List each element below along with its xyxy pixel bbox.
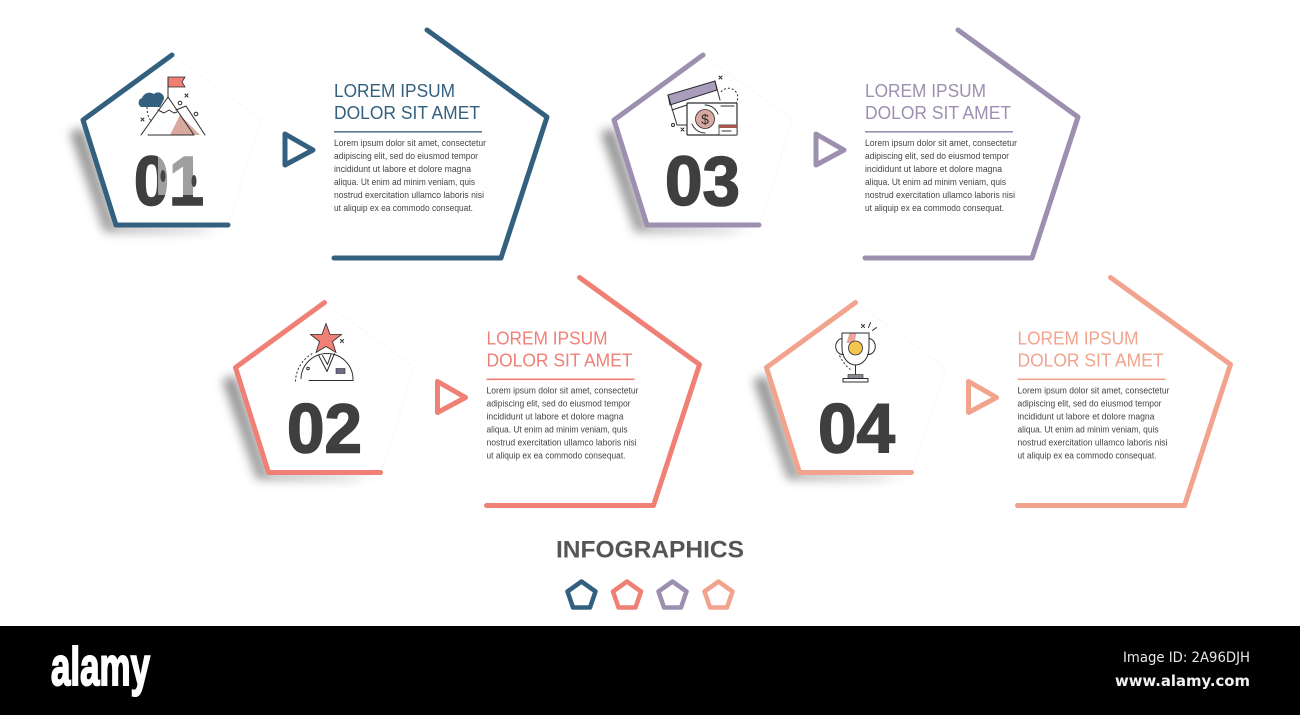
text pentagon outline (486, 278, 700, 506)
title: INFOGRAPHICS (556, 536, 744, 564)
body text: incididunt ut labore et dolore magna (865, 164, 1002, 174)
body text: incididunt ut labore et dolore magna (1018, 412, 1155, 422)
body text (1018, 386, 1170, 460)
icon: person with star (296, 324, 353, 382)
watermark over number (158, 153, 205, 195)
number 01: 01 (134, 142, 204, 220)
arrow (968, 382, 996, 412)
watermark bar (0, 626, 1300, 715)
heading (1018, 328, 1164, 370)
body text: ut aliquip ex ea commodo consequat. (486, 450, 626, 460)
heading: DOLOR SIT AMET (1018, 350, 1164, 370)
number pentagon outline (614, 55, 759, 225)
arrow (816, 134, 844, 165)
icon: credit card and money: $ (701, 111, 709, 127)
body text (865, 138, 1017, 213)
body text: aliqua. Ut enim ad minim veniam, quis (1018, 424, 1159, 434)
text pentagon outline (334, 30, 547, 258)
body text: ut aliquip ex ea commodo consequat. (334, 203, 473, 213)
body text (334, 138, 486, 213)
icon: mountain with flag (139, 77, 205, 135)
number pentagon outline (83, 55, 228, 225)
body text: ut aliquip ex ea commodo consequat. (865, 203, 1004, 213)
body text: ut aliquip ex ea commodo consequat. (1018, 450, 1156, 460)
number pentagon shadow (222, 376, 380, 482)
divider (865, 131, 1013, 133)
number pentagon background (614, 55, 793, 225)
heading: LOREM IPSUM (486, 328, 608, 348)
number pentagon shadow (754, 376, 912, 482)
body text: Lorem ipsum dolor sit amet, consectetur (486, 386, 639, 396)
panel: step 01 (70, 30, 547, 258)
body text: aliqua. Ut enim ad minim veniam, quis (334, 177, 476, 187)
panel: step 04 (754, 278, 1230, 506)
body text: adipiscing elit, sed do eiusmod tempor (334, 151, 478, 161)
website: www.alamy.com (1115, 672, 1250, 690)
icon: credit card and money (668, 76, 738, 135)
body text: Lorem ipsum dolor sit amet, consectetur (334, 138, 486, 148)
alamy logo: alamy (51, 637, 150, 697)
body text: adipiscing elit, sed do eiusmod tempor (865, 151, 1009, 161)
body text: Lorem ipsum dolor sit amet, consectetur (1018, 386, 1170, 396)
heading: LOREM IPSUM (865, 80, 986, 101)
heading (865, 80, 1011, 123)
body text: nostrud exercitation ullamco laboris nisi (334, 190, 484, 200)
body text (486, 386, 639, 460)
heading: LOREM IPSUM (1018, 328, 1138, 348)
divider (1018, 378, 1166, 380)
divider (334, 131, 482, 133)
body text: aliqua. Ut enim ad minim veniam, quis (486, 424, 628, 434)
legend pentagons (568, 582, 732, 608)
number pentagon shadow (70, 128, 228, 234)
panel: step 03 (601, 30, 1078, 258)
number pentagon background (766, 302, 946, 472)
arrow (438, 382, 466, 412)
body text: incididunt ut labore et dolore magna (486, 412, 624, 422)
body text: nostrud exercitation ullamco laboris nisi (1018, 438, 1168, 448)
number 04: 04 (818, 390, 895, 468)
body text: adipiscing elit, sed do eiusmod tempor (486, 398, 631, 408)
number 02: 02 (287, 390, 362, 468)
arrow (285, 134, 313, 165)
heading: DOLOR SIT AMET (865, 102, 1011, 123)
panel: step 02 (222, 278, 700, 506)
divider (486, 378, 634, 380)
text pentagon outline (1018, 278, 1230, 506)
body text: Lorem ipsum dolor sit amet, consectetur (865, 138, 1017, 148)
text pentagon outline (865, 30, 1078, 258)
body text: nostrud exercitation ullamco laboris nisi (486, 438, 637, 448)
body text: adipiscing elit, sed do eiusmod tempor (1018, 398, 1162, 408)
body text: aliqua. Ut enim ad minim veniam, quis (865, 177, 1007, 187)
number 03: 03 (665, 142, 740, 220)
heading: DOLOR SIT AMET (486, 350, 632, 370)
number pentagon background (236, 302, 414, 472)
icon: trophy with medal (836, 322, 876, 382)
heading (486, 328, 632, 370)
number pentagon background (83, 55, 262, 225)
image id: Image ID: 2A96DJH (1123, 650, 1250, 666)
heading: LOREM IPSUM (334, 80, 455, 101)
number pentagon outline (766, 302, 912, 472)
heading (334, 80, 480, 123)
body text: nostrud exercitation ullamco laboris nisi (865, 190, 1015, 200)
body text: incididunt ut labore et dolore magna (334, 164, 471, 174)
number pentagon shadow (601, 128, 759, 234)
heading: DOLOR SIT AMET (334, 102, 480, 123)
number pentagon outline (236, 302, 380, 472)
